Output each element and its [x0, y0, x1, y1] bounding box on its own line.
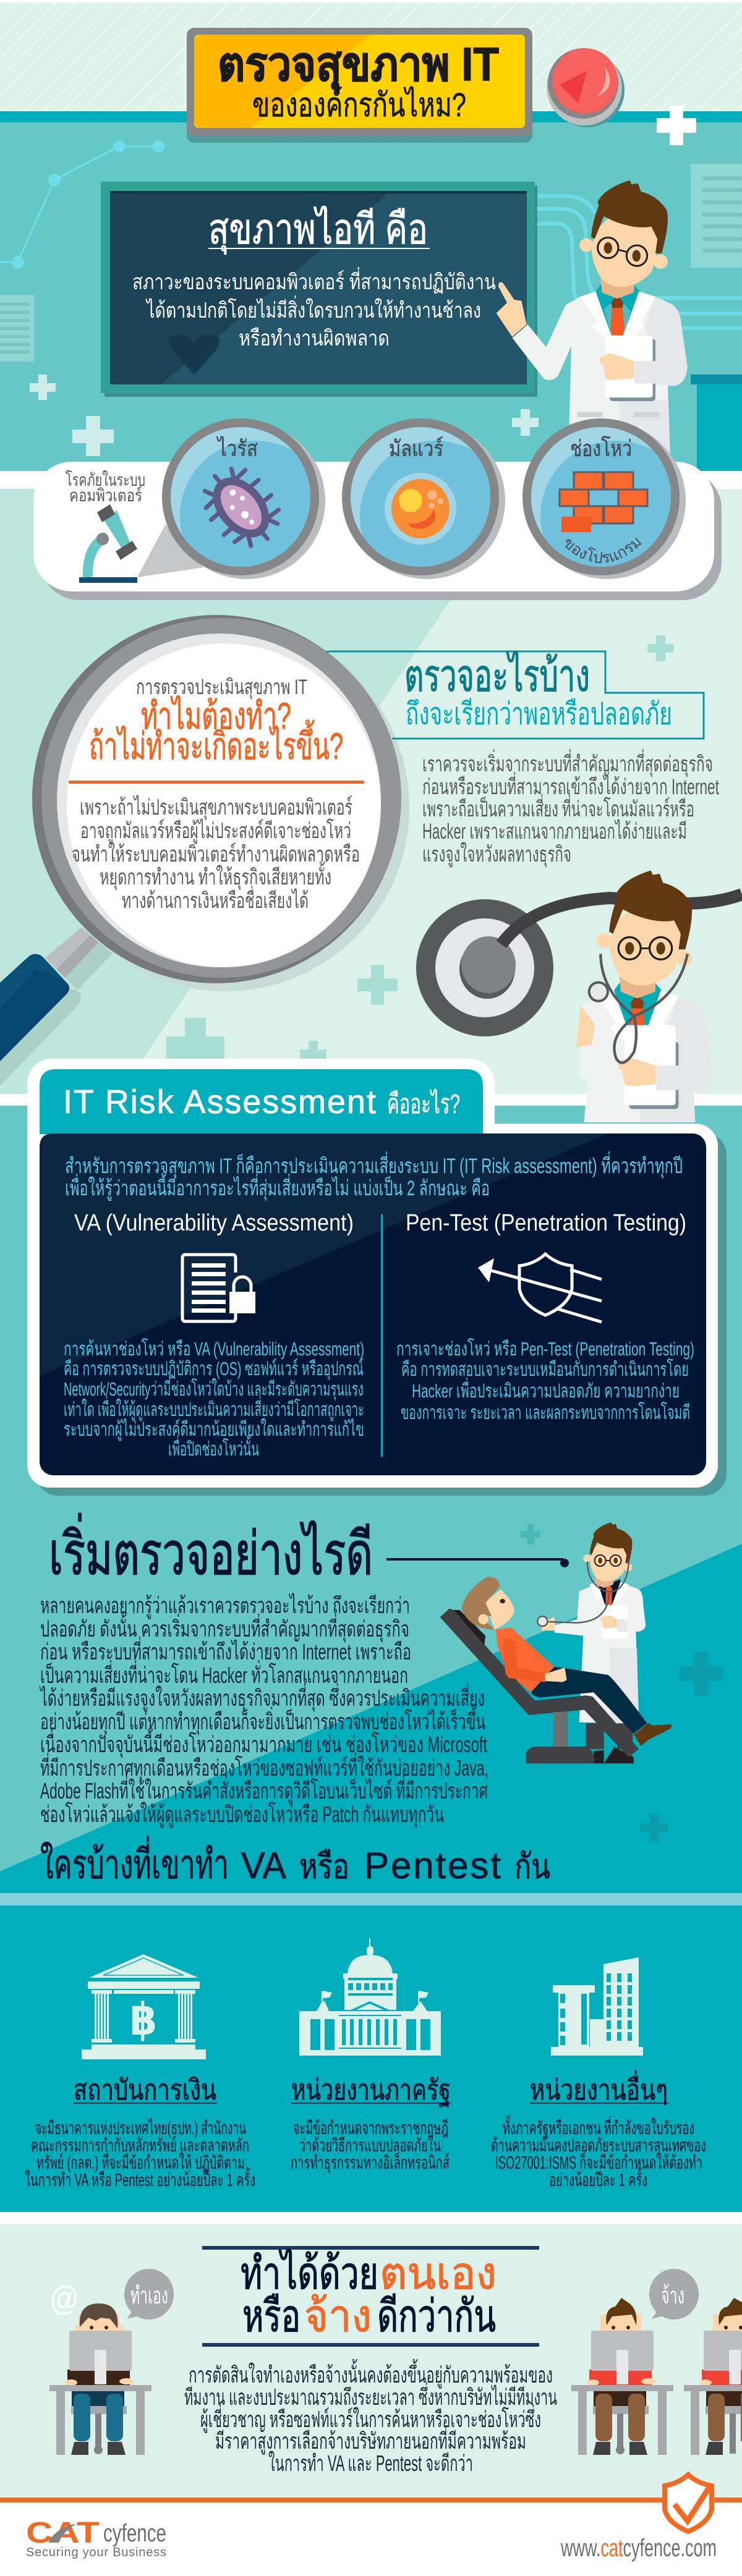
what to check text — [422, 749, 719, 867]
what to check text: แรงจูงใจหวังผลทางธุรกิจ — [422, 842, 571, 867]
how to start text: เป็นความเสี่ยงที่น่าจะโดน Hacker ทั่วโลกสแกนจากภายนอก — [40, 1660, 408, 1688]
speech bubble: ทำเอง — [130, 2283, 168, 2309]
how to start text: ได้ง่ายหรือมีแรงจูงใจหวังผลทางธุรกิจมากที่สุด ซึ่งควรประเมินความเสี่ยง — [39, 1683, 485, 1712]
heading: who does VA or Pentest: ใครบ้างที่เขาทำ — [40, 1836, 229, 1887]
icon: virus germ — [191, 456, 291, 559]
stethoscope — [537, 1562, 629, 1626]
at sign scribble: @ — [49, 2279, 78, 2318]
circle: virus: ไวรัส — [216, 436, 258, 461]
magnifier headline: ถ้าไม่ทำจะเกิดอะไรขึ้น? — [89, 719, 343, 767]
red alarm button — [547, 48, 625, 127]
how to start text: อย่างน้อยทุกปี แต่หากทำทุกเดือนก็จะยิ่งเป็นการตรวจพบช่องโหว่ได้เร็วขึ้น — [40, 1705, 485, 1735]
circle: program vulnerability — [522, 418, 686, 579]
column heading: สถาบันการเงิน — [74, 2074, 216, 2106]
board text: หรือทำงานผิดพลาด — [239, 326, 390, 350]
logo: CAT cyfence: CAT — [26, 2517, 100, 2549]
icon: arrow through shield — [478, 1254, 602, 1322]
VA description: คือ การตรวจระบบปฏิบัติการ (OS) ซอฟท์แวร์ หรืออุปกรณ์ — [64, 1358, 364, 1381]
magnifier body text: เพราะถ้าไม่ประเมินสุขภาพระบบคอมพิวเตอร์ — [80, 795, 352, 820]
speech bubble — [124, 2269, 174, 2320]
column: other agencies — [491, 1957, 706, 2190]
icon: shield checkmark — [665, 2475, 712, 2532]
column heading: หน่วยงานภาครัฐ — [291, 2074, 451, 2107]
icon: document with lock — [182, 1255, 255, 1321]
panel: IT Risk Assessment: คืออะไร? — [387, 1088, 460, 1119]
column text: ทรัพย์ (กลต.) ที่จะมีข้อกำหนดให้ ปฏิบัติตาม — [36, 2150, 245, 2173]
board heading: สุขภาพไอที คือ — [208, 205, 428, 255]
chart line decoration — [0, 140, 164, 268]
column headings: Pen-Test (Penetration Testing) — [406, 1210, 686, 1236]
magnifier body text: อาจถูกมัลแวร์หรือผู้ไม่ประสงค์ดีเจาะช่องโหว่ — [80, 818, 351, 844]
dental chair — [440, 1609, 639, 1757]
how to start text — [39, 1593, 488, 1828]
heading: who does VA or Pentest: Pentest — [364, 1845, 501, 1886]
magnifier body text: จนทำให้ระบบคอมพิวเตอร์ทำงานผิดพลาดหรือ — [72, 842, 360, 866]
intro text — [65, 1151, 683, 1201]
heading: do it yourself or hire — [202, 2246, 539, 2347]
magnifier body text: หยุดการทำงาน ทำให้ธุรกิจเสียหายทั้ง — [100, 861, 331, 890]
logo: CAT cyfence — [26, 2517, 166, 2559]
icon: big stethoscope — [416, 894, 742, 1036]
speech bubble: จ้าง — [661, 2283, 684, 2309]
board text — [132, 267, 496, 350]
how to start text: ก่อน หรือระบบที่สามารถเข้าถึงได้ง่ายจาก Internet เพราะถือ — [40, 1637, 411, 1664]
person: in-house worker — [49, 2269, 174, 2455]
connection pipes — [535, 196, 742, 328]
column text: อย่างน้อยปีละ 1 ครั้ง — [549, 2167, 647, 2190]
decorative document left — [0, 295, 34, 362]
VA description: เท่าใด เพื่อให้ผู้ดูแลระบบประเมินความเสี่ยงว่ามีโอกาสถูกเจาะ — [64, 1396, 364, 1421]
medical crosses section 3 — [521, 1524, 723, 1841]
heading: do it yourself or hire: หรือ — [242, 2292, 301, 2341]
curved caption: ของโปรแกรม — [565, 538, 642, 564]
panel: diseases in computer systems — [33, 418, 722, 600]
column text — [25, 2117, 255, 2190]
panel: IT Risk Assessment — [27, 1059, 727, 1496]
doctor head — [583, 1522, 632, 1588]
VA description: เพื่อปิดช่องโหว่นั้น — [168, 1435, 259, 1460]
intro text: เพื่อให้รู้ว่าตอนนี้มีอาการอะไรที่สุ่มเสี่ยงหรือไม่ แบ่งเป็น 2 ลักษณะ คือ — [65, 1173, 490, 1201]
VA description: Network/Securityว่ามีช่องโหว่ใดบ้าง และมีระดับความรุนแรง — [64, 1378, 364, 1401]
how to start text: หลายคนคงอยากรู้ว่าแล้วเราควรตรวจอะไรบ้าง ถึงจะเรียกว่า — [40, 1593, 410, 1619]
column: government agencies — [291, 1938, 451, 2174]
column text — [491, 2115, 706, 2190]
title line 1: ตรวจสุขภาพ IT — [218, 38, 499, 94]
kicker: การตรวจประเมินสุขภาพ IT — [136, 676, 307, 700]
column: financial institutions — [25, 1954, 255, 2190]
how to start text: ช่องโหว่แล้วแจ้งให้ผู้ดูแลระบบปิดช่องโหว่หรือ Patch กันแทบทุกวัน — [40, 1802, 444, 1828]
column text: ในการทำ VA หรือ Pentest อย่างน้อยปีละ 1 ครั้ง — [25, 2167, 255, 2190]
panel caption: โรคภัยในระบบ — [66, 470, 145, 489]
person: hired worker 2 — [684, 2298, 742, 2455]
VA description: การค้นหาช่องโหว่ หรือ VA (Vulnerability Assessment) — [64, 1338, 364, 1360]
icon: bank — [82, 1954, 206, 2059]
heading: how to start: เริ่มตรวจอย่างไรดี — [49, 1513, 373, 1587]
chalkboard — [101, 182, 537, 397]
column text: จะมีธนาคารแห่งประเทศไทย(ธปท.) สำนักงาน — [35, 2117, 246, 2138]
panel: magnifier — [32, 615, 409, 991]
column heading: หน่วยงานอื่นๆ — [530, 2070, 668, 2106]
circle: malware — [342, 418, 505, 579]
heading: who does VA or Pentest: กัน — [514, 1847, 550, 1886]
VA description: ระบบจากผู้ไม่ประสงค์ดีมากน้อยเพียงใดและทำการแก้ไข — [64, 1418, 364, 1441]
magnifier handle — [0, 927, 113, 1086]
cabinet — [691, 375, 742, 471]
column headings: VA (Vulnerability Assessment) — [74, 1210, 354, 1236]
icon: office buildings — [551, 1957, 643, 2056]
icon: brick wall — [560, 472, 647, 532]
how to start text: Adobe Flashที่ใช้ในการรันคำสั่งหรือการดูวิดีโอบนเว็บไซต์ ที่มีการประกาศ — [40, 1776, 488, 1805]
title sign — [187, 28, 532, 143]
icon: heart — [169, 334, 220, 375]
icon: microscope — [79, 504, 137, 583]
patient — [532, 1667, 647, 1734]
decorative document right — [691, 164, 742, 268]
column headings — [74, 1210, 686, 1236]
icon: government building — [299, 1938, 441, 2056]
magnifier body text: ทางด้านการเงินหรือชื่อเสียงได้ — [122, 886, 309, 913]
heading: who does VA or Pentest: VA — [241, 1845, 286, 1886]
circle: malware: มัลแวร์ — [389, 436, 443, 461]
icon: bank: ฿ — [130, 1993, 157, 2045]
heading: do it yourself or hire: ตนเอง — [380, 2249, 497, 2298]
doctor coat — [555, 1582, 646, 1723]
panel caption: คอมพิวเตอร์ — [69, 486, 142, 505]
medical crosses section 2 — [166, 635, 674, 1061]
Pen-Test description — [396, 1338, 694, 1423]
board text: สภาวะของระบบคอมพิวเตอร์ ที่สามารถปฏิบัติงาน — [132, 267, 496, 294]
how to start text: เนื่องจากปัจจุบันนี้มีช่องโหว่ออกมามากมาย เช่น ช่องโหว่ของ Microsoft — [40, 1728, 487, 1758]
icon: malware cell — [385, 473, 456, 544]
heading: do it yourself or hire: จ้าง — [304, 2292, 372, 2341]
column text — [291, 2119, 450, 2174]
heading: do it yourself or hire: ดีกว่ากัน — [377, 2292, 496, 2341]
heading: who does VA or Pentest — [40, 1836, 550, 1887]
decide text — [184, 2358, 557, 2476]
circle: virus — [162, 418, 325, 579]
panel caption — [66, 470, 145, 505]
what to check heading — [326, 651, 704, 739]
column text: ว่าด้วยวิธีการแบบปลอดภัยใน — [299, 2135, 441, 2156]
decide text: มีราคาสูงการเลือกจ้างบริษัทภายนอกที่มีความพร้อม — [215, 2426, 526, 2455]
how to start text: ที่มีการประกาศทุกเดือนหรือช่องโหว่ของซอฟท์แวร์ที่ใช้กันบ่อยอย่าง Java, — [40, 1753, 488, 1782]
medical crosses section 1 — [30, 106, 696, 456]
column text: การทำธุรกรรมทางอิเล็กทรอนิกส์ — [291, 2151, 450, 2174]
how to start text: ปลอดภัย ดังนั้น ควรเริ่มจากระบบที่สำคัญมากที่สุดต่อธุรกิจ — [40, 1612, 409, 1643]
what to check heading: ตรวจอะไรบ้าง — [404, 651, 590, 701]
doctor with stethoscope — [576, 870, 713, 1123]
title line 2: ขององค์กรกันไหม? — [252, 86, 466, 124]
heading: who does VA or Pentest: หรือ — [299, 1847, 349, 1886]
column text: คณะกรรมการกำกับหลักทรัพย์ และตลาดหลัก — [31, 2135, 249, 2156]
magnifier headline: ทำไมต้องทำ? — [141, 695, 291, 737]
decide text: ในการทำ VA และ Pentest จะดีกว่า — [268, 2451, 473, 2476]
VA description — [64, 1338, 364, 1460]
board text: ได้ตามปกติโดยไม่มีสิ่งใดรบกวนให้ทำงานช้าลง — [145, 295, 481, 323]
doctor legs — [586, 1723, 633, 1749]
logo: CAT cyfence: Securing your Business — [26, 2546, 166, 2559]
microscope beam — [137, 524, 203, 577]
heading: do it yourself or hire: ทำได้ด้วย — [241, 2248, 378, 2298]
magnifier body text — [72, 795, 360, 913]
speech bubble — [649, 2269, 699, 2320]
person: hired worker 1 — [571, 2269, 699, 2455]
doctor presenting — [497, 180, 688, 476]
logo: CAT cyfence: cyfence — [103, 2520, 166, 2547]
panel title: IT Risk Assessment — [63, 1083, 376, 1121]
doctor examining patient — [440, 1522, 672, 1763]
magnifier headline — [89, 695, 343, 767]
column text: จะมีข้อกำหนดจากพระราชกฤษฎี — [293, 2119, 448, 2138]
circle: program vulnerability: ช่องโหว่ — [570, 436, 632, 461]
